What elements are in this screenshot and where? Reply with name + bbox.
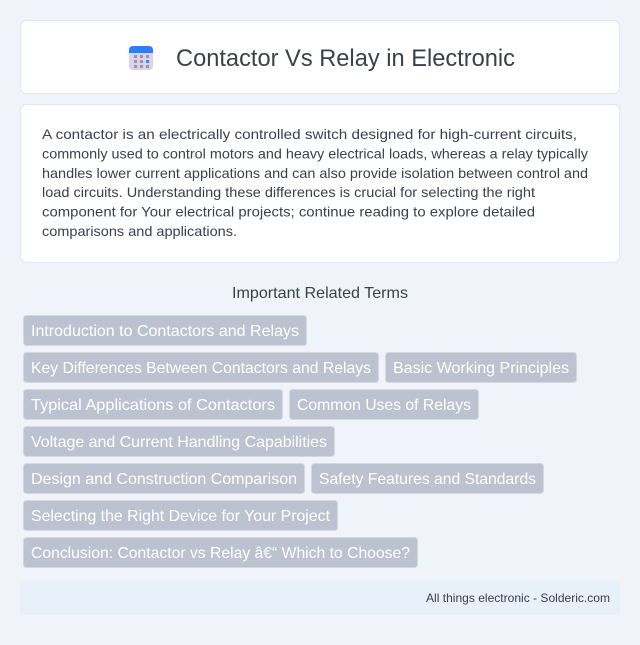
tag: safety	[312, 464, 544, 494]
tag: key differences	[24, 352, 378, 382]
tag: voltage and current: Voltage and Current Handling Capabilities	[31, 434, 327, 451]
tag: design: Design and Construction Comparison	[31, 471, 297, 488]
tag: voltage and current	[24, 426, 334, 456]
tag: safety: Safety Features and Standards	[319, 471, 536, 488]
footer	[20, 581, 620, 615]
intro text: A contactor is an electrically controlled switch designed for high-current circuits,	[42, 126, 577, 142]
tag: introduction: Introduction to Contactors and Relays	[31, 323, 299, 340]
tag: common uses	[290, 390, 478, 420]
tag: introduction	[24, 316, 306, 346]
panel: intro paragraph	[20, 104, 620, 262]
tag: applications	[24, 390, 282, 420]
tag: selecting: Selecting the Right Device for Your Project	[31, 508, 331, 525]
panel: header	[20, 20, 620, 94]
tag: selecting	[24, 500, 338, 530]
tag: conclusion: Conclusion: Contactor vs Relay â€“ Which to Choose?	[31, 545, 410, 562]
intro text: commonly used to control motors and heavy electrical loads, whereas a relay typically	[42, 145, 588, 161]
tag: conclusion	[24, 538, 418, 568]
title: Contactor Vs Relay in Electronic	[176, 45, 515, 72]
tag: key differences: Key Differences Between Contactors and Relays	[31, 360, 371, 377]
intro text: comparisons and applications.	[42, 223, 237, 239]
intro text: component for Your electrical projects; continue reading to explore detailed	[42, 204, 535, 220]
intro text	[42, 126, 588, 239]
intro text: load circuits. Understanding these differences is crucial for selecting the right	[42, 184, 535, 200]
tag: common uses: Common Uses of Relays	[297, 397, 471, 414]
tag: applications: Typical Applications of Contactors	[31, 397, 275, 414]
heading: related terms: Important Related Terms	[232, 285, 408, 302]
intro text: handles lower current applications and can also provide isolation between control and	[42, 165, 588, 181]
icon: calendar	[129, 46, 153, 70]
tag: design	[24, 464, 304, 494]
tag: working principles: Basic Working Principles	[393, 360, 569, 377]
related term tags	[24, 316, 576, 568]
footer text: All things electronic - Solderic.com	[426, 591, 610, 605]
tag: working principles	[386, 352, 576, 382]
